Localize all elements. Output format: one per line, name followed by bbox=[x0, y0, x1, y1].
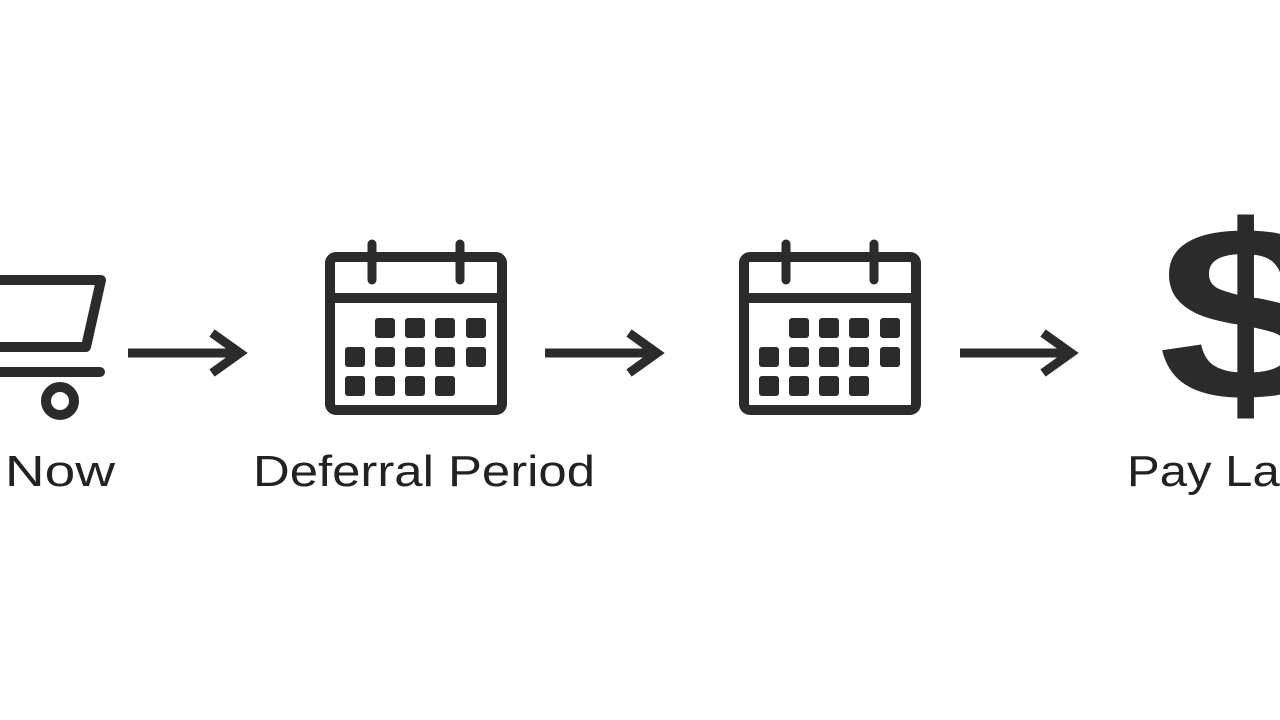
arrow 1 bbox=[128, 333, 240, 373]
icon: shopping cart bbox=[0, 280, 101, 415]
label: deferral period: Deferral Period bbox=[253, 447, 595, 496]
icon: calendar 2 bbox=[744, 244, 916, 410]
arrow 3 bbox=[960, 333, 1071, 373]
arrow 2 bbox=[545, 333, 657, 373]
icon: calendar 1 bbox=[330, 244, 502, 410]
